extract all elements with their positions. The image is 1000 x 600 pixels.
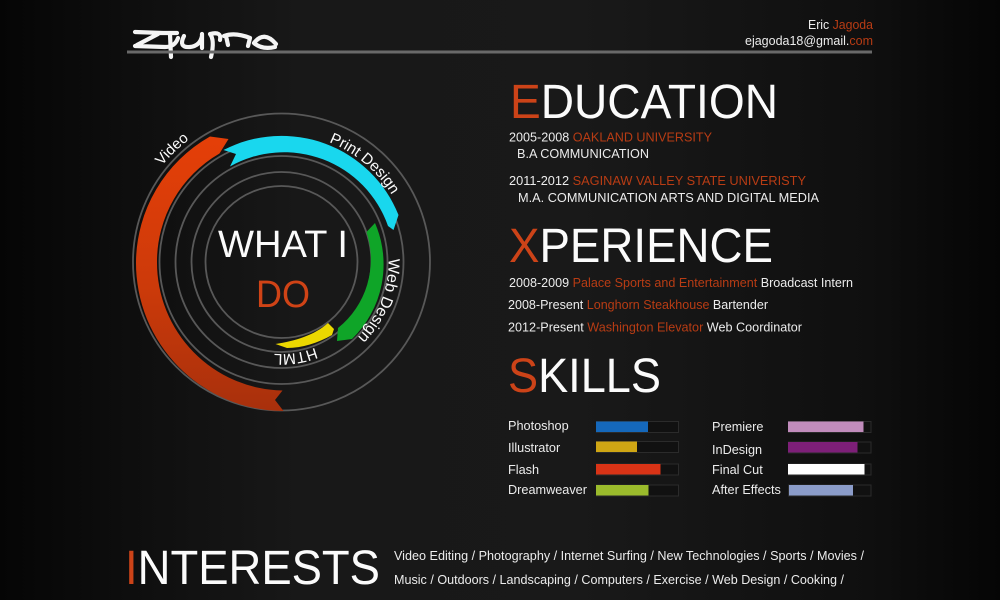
label: web design: Web Design: [358, 259, 400, 342]
heading: SKILLS: [508, 349, 661, 403]
skill: after effects: After Effects: [712, 483, 781, 497]
education entries: M.A. COMMUNICATION ARTS AND DIGITAL MEDIA: [518, 190, 819, 205]
label: video: Video: [154, 134, 188, 163]
contact email: ejagoda18@gmail.com: [745, 33, 873, 48]
section: interests: [125, 541, 864, 595]
arc: print design: [224, 136, 398, 230]
label: print design: Print Design: [330, 132, 398, 194]
center title: DO: [256, 274, 310, 316]
interests list: Music / Outdoors / Landscaping / Computers / Exercise / Web Design / Cooking /: [394, 572, 844, 587]
skill: final cut: Final Cut: [712, 463, 763, 477]
heading: EDUCATION: [510, 75, 778, 129]
skill: premiere: Premiere: [712, 420, 763, 434]
radial chart: what I do: [132, 112, 431, 412]
skill: flash: [508, 463, 678, 477]
education entries: [509, 130, 819, 205]
heading: INTERESTS: [125, 541, 380, 595]
arc: video: [136, 136, 284, 411]
contact name: Eric Jagoda: [808, 17, 874, 32]
skill: premiere: [712, 420, 871, 434]
logo mark: [135, 32, 276, 57]
skill: illustrator: [508, 441, 678, 455]
label: html: HTML: [274, 348, 318, 365]
skill: indesign: [712, 442, 871, 457]
experience entries: 2008-Present Longhorn Steakhouse Bartender: [508, 297, 769, 312]
education entries: B.A COMMUNICATION: [517, 146, 649, 161]
skill: after effects: [712, 483, 871, 497]
arc: html: [276, 323, 334, 348]
skill: indesign: InDesign: [712, 443, 762, 457]
education entries: 2005-2008 OAKLAND UNIVERSITY: [509, 130, 712, 144]
experience entries: [508, 275, 853, 334]
section: skills: [508, 349, 871, 497]
concentric rings: [133, 114, 430, 410]
skill: photoshop: Photoshop: [508, 419, 569, 433]
skill: photoshop: [508, 419, 678, 433]
heading: XPERIENCE: [509, 219, 773, 273]
header rule: [127, 50, 872, 54]
skill: dreamweaver: Dreamweaver: [508, 483, 588, 497]
skill: illustrator: Illustrator: [508, 441, 561, 455]
section: education: [509, 75, 819, 205]
section: experience: [508, 219, 853, 334]
center title: [218, 224, 348, 316]
education entries: 2011-2012 SAGINAW VALLEY STATE UNIVERISTY: [509, 173, 806, 188]
interests list: [394, 548, 864, 587]
center title: WHAT I: [218, 224, 348, 266]
skill: final cut: [712, 463, 871, 477]
experience entries: 2008-2009 Palace Sports and Entertainment Broadcast Intern: [509, 275, 853, 290]
arc: web design: [337, 223, 384, 341]
experience entries: 2012-Present Washington Elevator Web Coordinator: [508, 320, 803, 334]
header: logo and contact: [127, 17, 874, 57]
skill: dreamweaver: [508, 483, 678, 497]
skill: flash: Flash: [508, 463, 539, 477]
interests list: Video Editing / Photography / Internet Surfing / New Technologies / Sports / Movies /: [394, 548, 864, 563]
